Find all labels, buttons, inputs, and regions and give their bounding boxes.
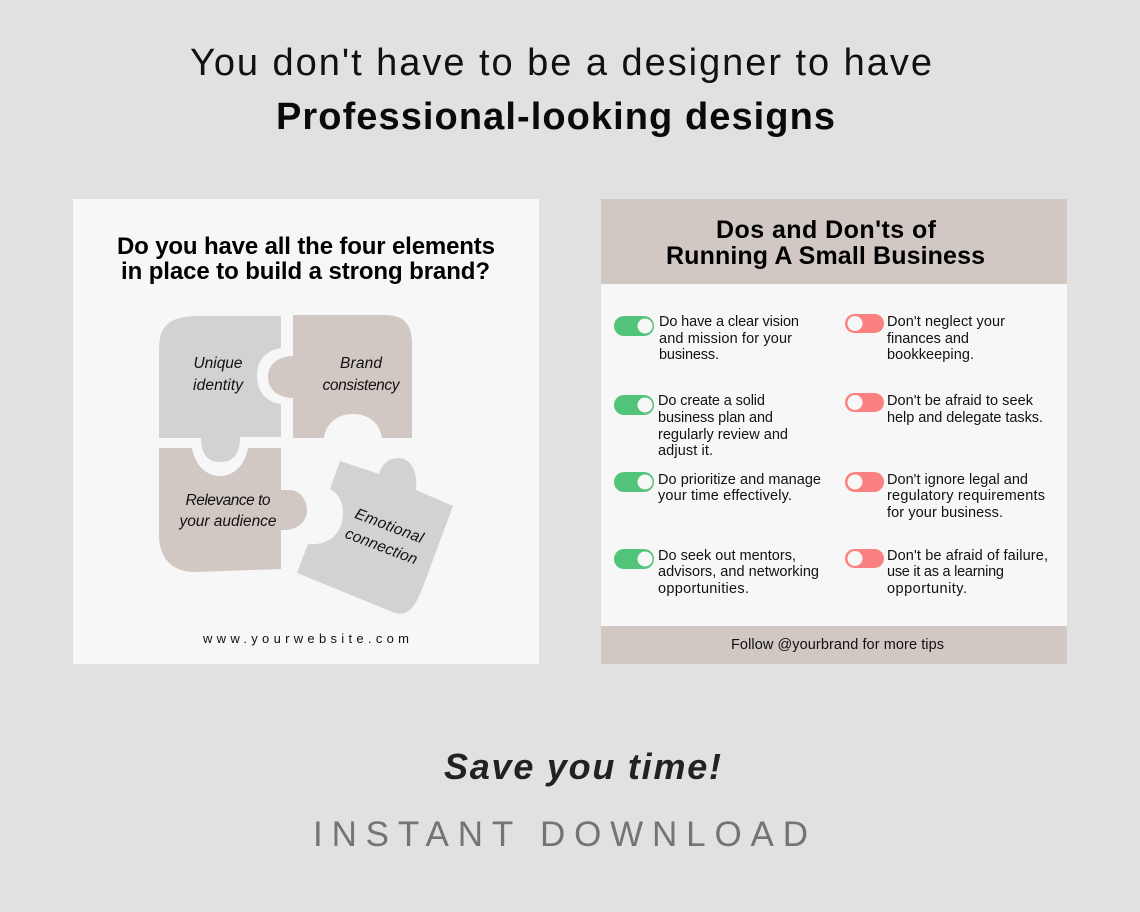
- title: Professional-looking designs: [276, 96, 835, 138]
- do item 2: Do create a solid: [658, 393, 765, 409]
- puzzle piece: emotional connection: Emotional: [352, 505, 426, 547]
- instant download: INSTANT DOWNLOAD: [313, 815, 808, 854]
- puzzle piece: relevance to your audience: your audience: [178, 513, 277, 530]
- do item 1: [614, 314, 799, 363]
- puzzle piece: brand consistency: [268, 315, 412, 438]
- puzzle piece: unique identity: [159, 316, 281, 462]
- do item 3: Do prioritize and manage: [658, 472, 821, 488]
- don't item 2: [845, 393, 1043, 426]
- website: www.yourwebsite.com: [202, 631, 409, 646]
- do item 2: [614, 393, 788, 459]
- puzzle piece: unique identity: identity: [193, 377, 244, 394]
- puzzle piece: emotional connection: connection: [343, 525, 420, 568]
- header band: Running A Small Business: [666, 242, 985, 270]
- do item 4: advisors, and networking: [658, 564, 819, 580]
- don't item 1: finances and: [887, 331, 969, 347]
- don't item 3: regulatory requirements: [887, 488, 1045, 504]
- don't item 3: [845, 472, 1045, 521]
- puzzle piece: brand consistency: consistency: [322, 377, 401, 394]
- do item 1: and mission for your: [659, 331, 792, 347]
- do item 4: [614, 548, 819, 597]
- don't item 1: [845, 314, 1005, 363]
- puzzle piece: unique identity: Unique: [194, 355, 243, 372]
- do item 4: opportunities.: [658, 581, 749, 597]
- panel: dos and don'ts: [601, 199, 1067, 664]
- footer band: [601, 626, 1067, 664]
- don't item 2: Don't be afraid to seek: [887, 393, 1034, 409]
- do item 4: Do seek out mentors,: [658, 548, 796, 564]
- panel: four elements of a strong brand: [73, 199, 539, 664]
- header band: [601, 199, 1067, 284]
- panel heading: in place to build a strong brand?: [121, 258, 490, 285]
- don't item 4: [845, 548, 1048, 597]
- puzzle piece: relevance to your audience: Relevance to: [186, 492, 271, 509]
- don't item 4: use it as a learning: [887, 564, 1004, 580]
- footer band: Follow @yourbrand for more tips: [731, 637, 944, 653]
- don't item 1: Don't neglect your: [887, 314, 1005, 330]
- puzzle piece: relevance to your audience: [159, 448, 307, 572]
- panel heading: [117, 233, 495, 285]
- puzzle diagram: [159, 315, 453, 614]
- don't item 3: Don't ignore legal and: [887, 472, 1028, 488]
- title: You don't have to be a designer to have: [190, 42, 932, 84]
- panel heading: Do you have all the four elements: [117, 233, 495, 260]
- do item 2: business plan and: [658, 410, 773, 426]
- do item 2: adjust it.: [658, 443, 713, 459]
- header band: Dos and Don'ts of: [716, 216, 937, 244]
- don't item 2: help and delegate tasks.: [887, 410, 1043, 426]
- don't item 4: Don't be afraid of failure,: [887, 548, 1048, 564]
- puzzle piece: emotional connection: [297, 458, 453, 614]
- do item 2: regularly review and: [658, 427, 788, 443]
- don't item 3: for your business.: [887, 505, 1003, 521]
- don't item 1: bookkeeping.: [887, 347, 974, 363]
- don't item 4: opportunity.: [887, 581, 967, 597]
- do item 1: business.: [659, 347, 719, 363]
- do item 1: Do have a clear vision: [659, 314, 799, 330]
- puzzle piece: brand consistency: Brand: [340, 355, 383, 372]
- title: [190, 42, 932, 138]
- do item 3: your time effectively.: [658, 488, 792, 504]
- tagline: Save you time!: [444, 746, 721, 787]
- do item 3: [614, 472, 821, 504]
